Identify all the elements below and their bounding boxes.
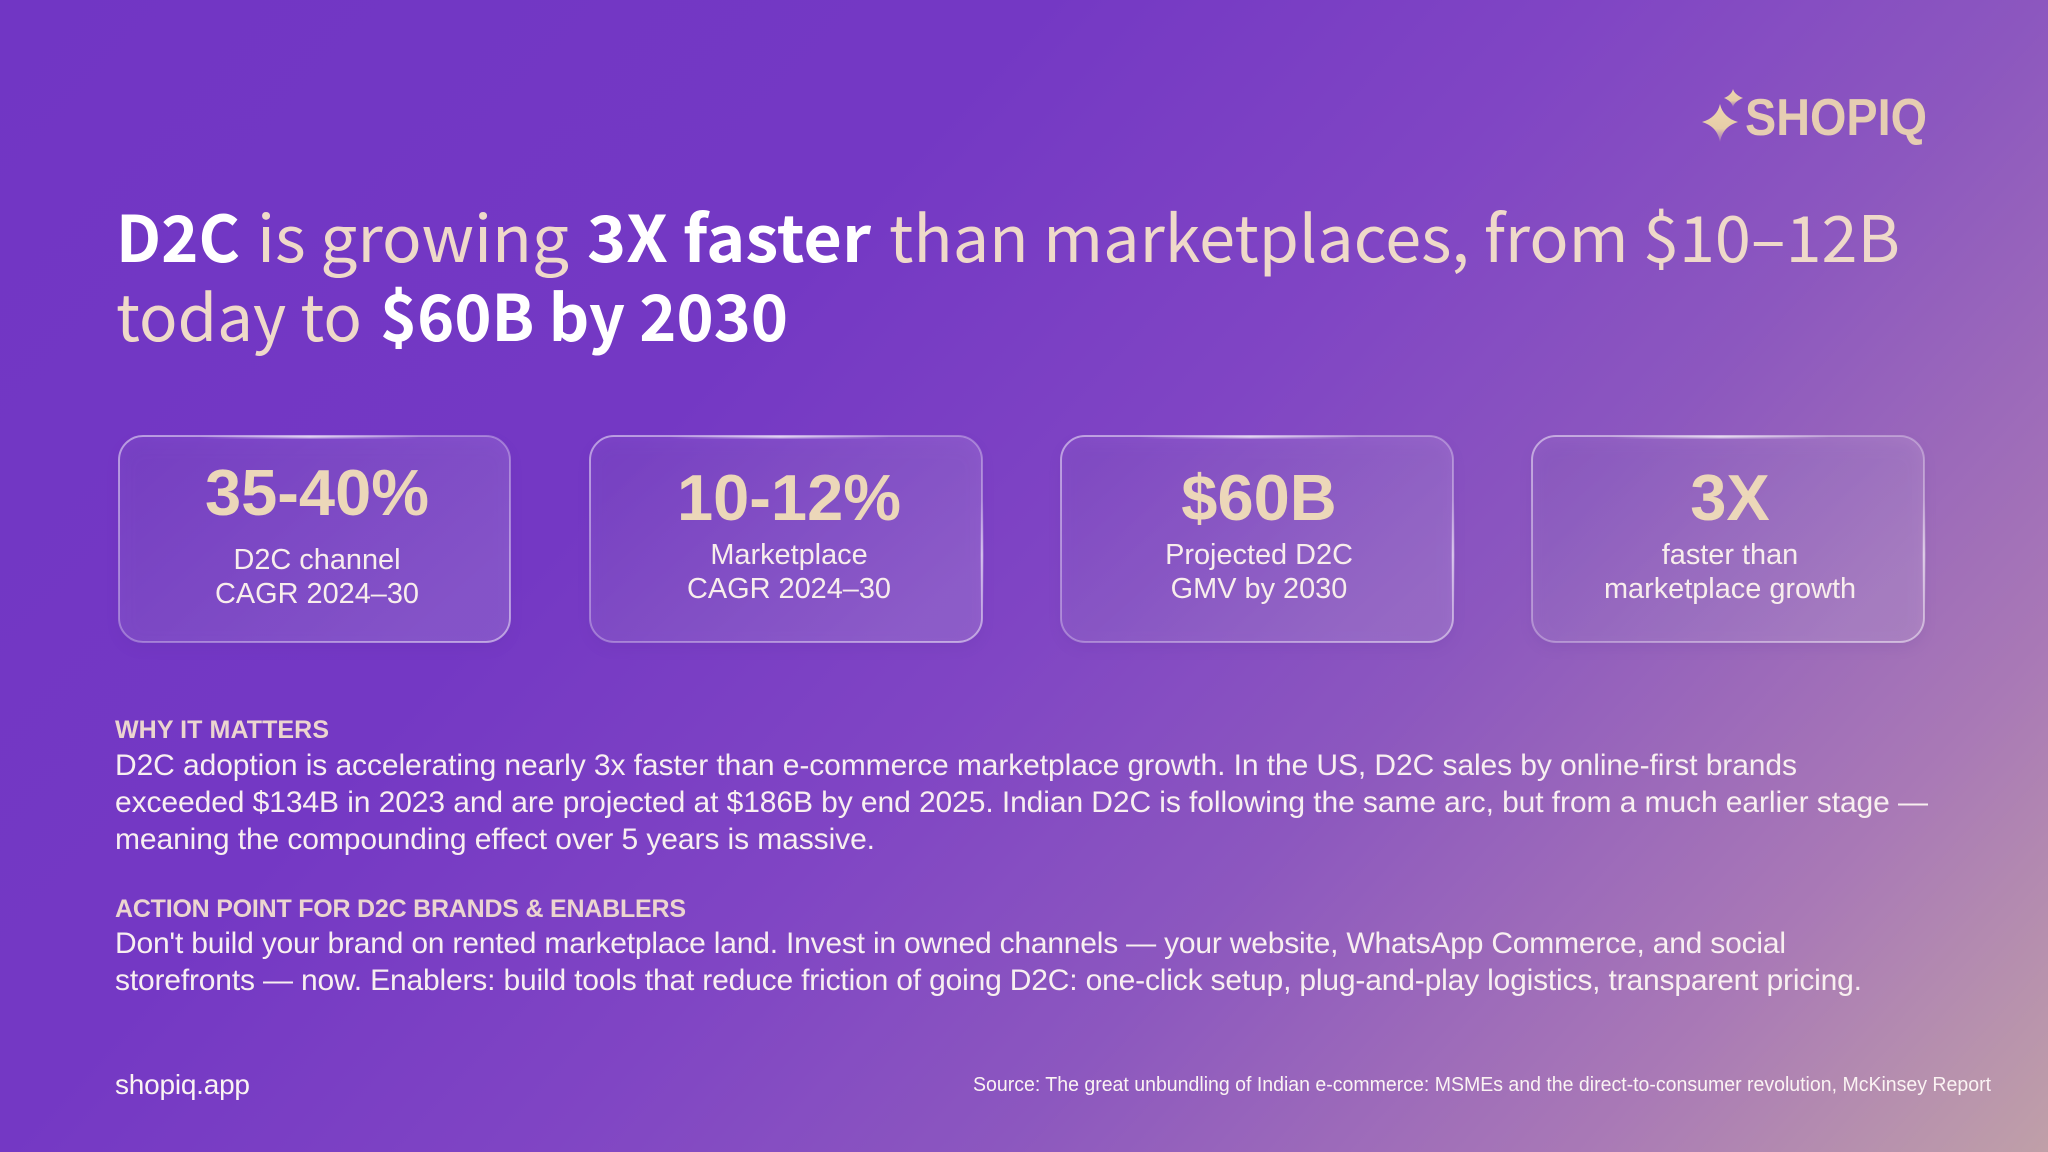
panel: stat card Marketplace CAGR: Marketplace — [710, 539, 868, 571]
text block: why it matters — [115, 716, 1928, 856]
title: is growing — [257, 189, 569, 281]
panel: stat card projected GMV: GMV by 2030 — [1171, 573, 1347, 605]
panel: stat card projected GMV: Projected D2C — [1165, 539, 1353, 571]
text block: action point: storefronts — now. Enablers: build tools that reduce friction of going D2C: one-click setup, plug-and-play logistics, transparent pricing. — [115, 964, 1862, 997]
panel: stat card 3X faster — [1532, 436, 1926, 648]
panel: stat card D2C channel CAGR: D2C channel — [233, 544, 401, 576]
title: than marketplaces, from $10–12B — [889, 189, 1900, 281]
panel: stat card Marketplace CAGR: 10-12% — [677, 461, 901, 534]
title: $60B by 2030 — [380, 268, 788, 360]
panel: stat card D2C channel CAGR: CAGR 2024–30 — [215, 578, 419, 610]
panel: stat card projected GMV — [1061, 436, 1454, 648]
text block: why it matters: D2C adoption is accelerating nearly 3x faster than e-commerce marketplace growth. In the US, D2C sales by online-first brands — [115, 749, 1797, 782]
text block: action point: ACTION POINT FOR D2C BRANDS & ENABLERS — [115, 895, 686, 923]
footer: source: Source: The great unbundling of Indian e-commerce: MSMEs and the direct-to-consumer revolution, McKinsey Report — [973, 1074, 1991, 1096]
panel: stat card D2C channel CAGR: 35-40% — [205, 456, 429, 529]
text block: why it matters: exceeded $134B in 2023 and are projected at $186B by end 2025. Indian D2C is following the same arc, but from a much earlier stage — — [115, 786, 1928, 819]
panel: stat card Marketplace CAGR — [590, 436, 984, 648]
text block: action point — [115, 895, 1862, 997]
panel: stat card 3X faster: marketplace growth — [1604, 573, 1856, 605]
title — [116, 189, 1900, 360]
footer: website: shopiq.app — [115, 1069, 250, 1100]
text block: why it matters: WHY IT MATTERS — [115, 716, 329, 744]
logo: SHOPIQ: SHOPIQ — [1745, 89, 1927, 147]
title: today to — [116, 268, 362, 360]
panel: stat card Marketplace CAGR: CAGR 2024–30 — [687, 573, 891, 605]
title: 3X faster — [587, 189, 871, 281]
panel: stat card 3X faster: 3X — [1690, 461, 1770, 534]
icon: sparkle stars — [1702, 89, 1743, 142]
title: D2C — [116, 189, 240, 281]
panel: stat card D2C channel CAGR — [119, 436, 510, 648]
panel: stat card 3X faster: faster than — [1662, 539, 1798, 571]
text block: action point: Don't build your brand on rented marketplace land. Invest in owned channels — your website, WhatsApp Commerce, and social — [115, 927, 1786, 960]
text block: why it matters: meaning the compounding effect over 5 years is massive. — [115, 823, 875, 856]
panel: stat card projected GMV: $60B — [1181, 461, 1337, 534]
